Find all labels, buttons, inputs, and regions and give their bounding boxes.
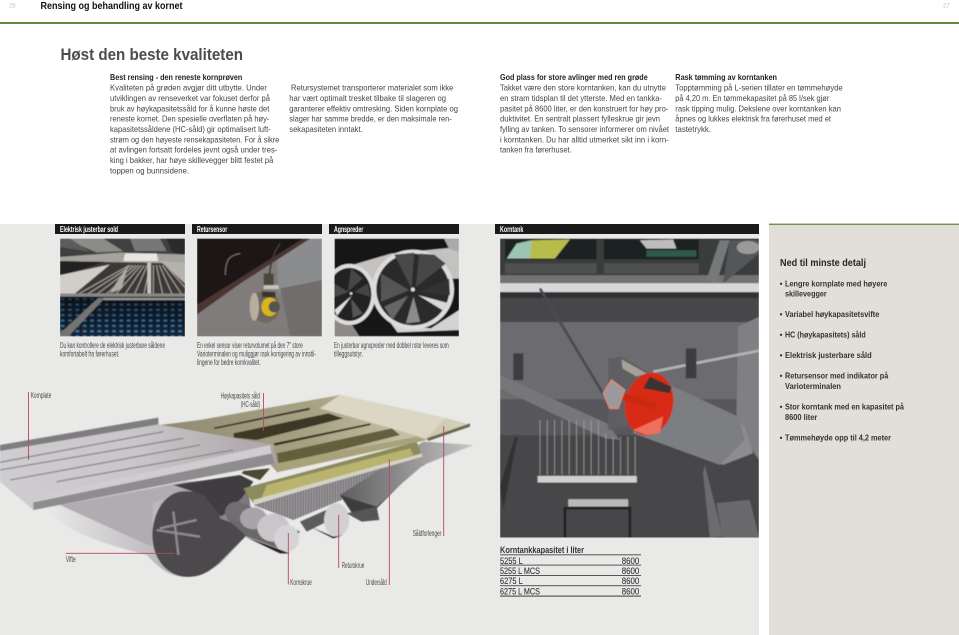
summary list: • (780, 403, 783, 412)
text column: god plass (500, 72, 670, 155)
callout: kornskrue: Kornskrue (290, 578, 312, 587)
row 5255 L MCS: 5255 L MCS (500, 565, 540, 576)
row 5255 L: 5255 L (500, 555, 523, 566)
capacity table: 8600 (622, 565, 639, 576)
text column: best rensing: toppen og bunnsidene. (110, 165, 189, 175)
text column: god plass: pasitet på 8600 liter, er den konstruert for høy pro- (500, 103, 668, 113)
label bar: agnspreder: Agnspreder (334, 225, 363, 234)
summary list: Elektrisk justerbare såld (785, 350, 872, 360)
text column: best rensing: bruk av høykapasitetssåld for å kunne høste det (110, 103, 270, 113)
panel: right summary background (769, 224, 959, 635)
caption: spreader: En justerbar agnspreder med dobbel rotor leveres som (334, 341, 449, 350)
text column: god plass: duktivitet. En sentralt plassert fylleskrue gir jevn (500, 114, 660, 124)
photo: grain tank (500, 238, 759, 538)
text column: god plass: fylling av tanken. To sensorer informerer om nivået (500, 124, 670, 134)
label bar: korntank (495, 224, 759, 234)
label bar: elektrisk justerbar sold: Elektrisk justerbar sold (60, 225, 118, 234)
row 6275 L: 6275 L (500, 575, 523, 586)
text column: retursystemet: sekapasiteten inntakt. (289, 124, 363, 134)
callout: saldforlenger (413, 426, 444, 538)
page number left: 26 (9, 4, 16, 10)
text column: god plass: Takket være den store korntanken, kan du utnytte (500, 83, 666, 93)
callout: kornplate (28, 391, 52, 460)
text column: retursystemet: garanterer effektiv omtresking. Siden kornplate og (289, 103, 458, 113)
label bar: korntank: Korntank (500, 225, 524, 234)
caption: sensor (197, 341, 316, 367)
summary list: 8600 liter (785, 413, 818, 422)
summary list: • (780, 351, 783, 360)
callout: undersald (366, 459, 389, 587)
callout: undersald: Undersåld (366, 578, 387, 587)
diagram: cleaning system cutaway (0, 395, 473, 577)
title: Høst den beste kvaliteten (60, 46, 243, 64)
summary list: Variabel høykapasitetsvifte (785, 310, 880, 319)
capacity table: 8600 (622, 555, 639, 566)
caption: spreader (334, 341, 449, 359)
text column: rask tomming: åpnes og lukkes elektrisk fra førerhuset med et (675, 114, 832, 124)
text column: rask tomming: tastetrykk. (675, 124, 711, 134)
capacity table: 8600 (622, 575, 639, 586)
summary list: skillevegger (785, 290, 827, 299)
summary list: Varioterminalen (785, 382, 841, 391)
summary list: • (780, 310, 783, 319)
label bar: retursensor: Retursensor (197, 225, 227, 234)
summary list: • (780, 279, 783, 288)
text column: best rensing: utviklingen av renseverket var fokuset derfor på (110, 93, 270, 103)
summary list: Tømmehøyde opp til 4,2 meter (785, 433, 892, 442)
text column: god plass: God plass for store avlinger med ren grøde (500, 72, 648, 82)
text column: best rensing: king i bakker, har høye skillevegger blitt festet på (110, 155, 273, 165)
caption: sensor: lingene for bedre kornkvalitet. (197, 358, 261, 367)
capacity table (500, 545, 641, 597)
text column: god plass: tanken fra førerhuset. (500, 145, 572, 155)
caption: sieve: Du kan kontrollere de elektrisk justerbare såldene (60, 341, 165, 350)
text column: god plass: en stram tidsplan til det ytterste. Med en tankka- (500, 93, 662, 103)
summary list: • (780, 372, 783, 381)
callout: hoykapasitets sald: Høykapasitets såld (221, 391, 260, 400)
text column: rask tomming: Rask tømming av korntanken (675, 72, 777, 82)
header rule (0, 22, 959, 24)
callout: kornskrue (288, 533, 312, 587)
page header (0, 1, 959, 24)
text column: rask tomming (675, 72, 843, 134)
photo: chaff spreader (334, 238, 459, 336)
callout: saldforlenger: Såldforlenger (413, 529, 441, 538)
summary list: Retursensor med indikator på (785, 371, 889, 381)
table heading: Korntankkapasitet i liter (500, 545, 584, 555)
text column: retursystemet (289, 83, 458, 134)
caption: sensor: En enkel sensor viser returvolumet på den 7" store (197, 341, 303, 350)
text column: best rensing: strøm og den høyeste rensekapasiteten. For å sikre (110, 134, 279, 144)
callout: returskrue (339, 515, 365, 570)
text column: retursystemet: Retursystemet transporterer materialet som ikke (291, 83, 453, 93)
summary list: Lengre kornplate med høyere (785, 279, 888, 288)
text column: rask tomming: Topptømming på L-serien tillater en tømmehøyde (675, 83, 843, 93)
callout: hoykapasitets sald (221, 391, 264, 431)
text column: rask tomming: rask tipping mulig. Dekslene over korntanken kan (675, 103, 841, 113)
label bar: elektrisk justerbar sold (55, 224, 185, 234)
capacity table: 8600 (622, 585, 639, 596)
summary heading: Ned til minste detalj (780, 258, 866, 269)
callout: hoykapasitets sald: (HC-såld) (241, 400, 260, 409)
text column: rask tomming: på 4,20 m. En tømmekapasitet på 85 l/sek gjør (675, 93, 829, 103)
caption: spreader: tilleggsutstyr. (334, 350, 363, 359)
caption: sensor: Varioterminalen og muliggjør rask korrigering av innstil- (197, 350, 316, 359)
callout: kornplate: Kornplate (31, 391, 52, 400)
page number right: 27 (943, 4, 950, 10)
text column: best rensing (110, 72, 279, 175)
summary list: Stor korntank med en kapasitet på (785, 402, 904, 412)
caption: sieve (60, 341, 165, 359)
text column: best rensing: kapasitetssåldene (HC-såld) gir optimalisert luft- (110, 124, 271, 134)
callout: vifte (66, 553, 175, 564)
label bar: agnspreder (329, 224, 459, 234)
summary list: HC (høykapasitets) såld (785, 330, 866, 340)
text column: retursystemet: har vært optimalt tresket tilbake til slageren og (289, 93, 446, 103)
photo: adjustable sieve (60, 238, 185, 336)
photo: return sensor (197, 238, 322, 336)
caption: sieve: komfortabelt fra førerhuset. (60, 350, 119, 359)
callout: vifte: Vifte (66, 555, 76, 564)
row 6275 L MCS: 6275 L MCS (500, 585, 540, 596)
text column: best rensing: reneste kornet. Den spesielle overflaten på høy- (110, 114, 269, 124)
running head: Rensing og behandling av kornet (40, 1, 183, 12)
text column: retursystemet: slager har samme bredde, er den maksimale ren- (289, 114, 452, 124)
text column: god plass: i korntanken. Du har alltid utmerket sikt inn i korn- (500, 134, 669, 144)
text column: best rensing: at avlingen fortsatt fordeles jevnt også under tres- (110, 145, 277, 155)
text column: best rensing: Best rensing - den reneste kornprøven (110, 72, 242, 82)
summary list: • (780, 433, 783, 442)
summary list: • (780, 331, 783, 340)
text column: best rensing: Kvaliteten på grøden avgjør ditt utbytte. Under (110, 83, 267, 93)
label bar: retursensor (192, 224, 322, 234)
summary list (780, 279, 904, 442)
panel: grey lower background (0, 224, 759, 635)
callout: returskrue: Returskrue (342, 561, 365, 570)
